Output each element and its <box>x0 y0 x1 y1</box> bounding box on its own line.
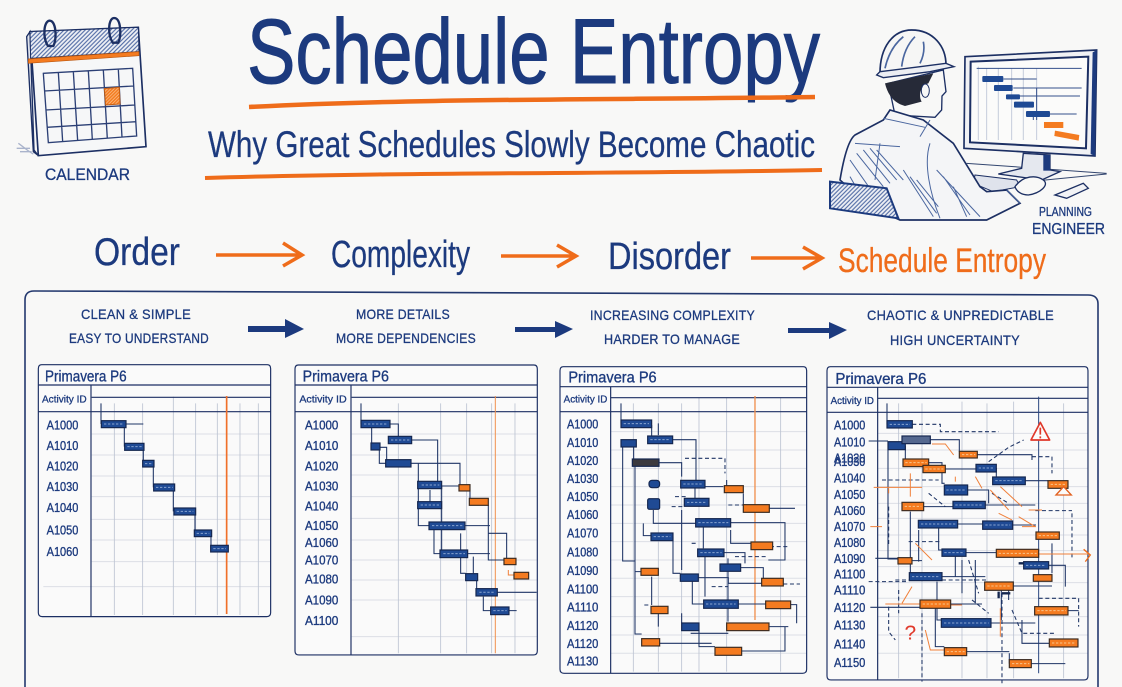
caption: stage 2: MORE DEPENDENCIES <box>336 330 476 346</box>
caption: stage 2: MORE DETAILS <box>356 306 450 322</box>
activity ids: A1090 <box>834 552 865 566</box>
flow: order: Order <box>94 231 180 274</box>
activity ids: A1000 <box>47 418 78 432</box>
activity ids: A1030 <box>834 455 865 469</box>
activity ids: A1060 <box>834 504 865 518</box>
calendar label: CALENDAR <box>45 165 130 184</box>
caption: stage 4: CHAOTIC & UNPREDICTABLE <box>867 307 1054 323</box>
activity ids: A1130 <box>567 655 598 669</box>
engineer label: PLANNING <box>1039 204 1092 219</box>
activity ids: A1000 <box>567 418 598 432</box>
main panel frame <box>25 291 1098 687</box>
orange scribble links <box>870 444 1089 650</box>
task bars <box>101 421 228 552</box>
activity ids: A1070 <box>305 553 338 567</box>
title underline <box>249 97 815 107</box>
activity ids: A1040 <box>47 501 78 515</box>
activity ids: A1120 <box>567 619 598 633</box>
blue task bars <box>621 420 741 631</box>
activity ids: A1050 <box>567 490 598 504</box>
activity ids: A1000 <box>305 419 338 433</box>
panel: gantt complexity <box>295 365 537 655</box>
activity ids: A1020 <box>305 459 338 473</box>
flow: complexity: Complexity <box>331 234 470 276</box>
activity ids: A1050 <box>305 519 338 533</box>
activity ids: A1030 <box>567 472 598 486</box>
caption: stage 2 <box>336 306 476 346</box>
data date line <box>753 396 757 620</box>
activity ids: A1100 <box>305 614 338 628</box>
blue task bars <box>361 420 509 615</box>
subtitle: Why Great Schedules Slowly Become Chaotic <box>208 124 815 165</box>
caption: stage 3: HARDER TO MANAGE <box>604 331 740 347</box>
activity ids <box>834 418 865 670</box>
activity ids <box>47 418 78 559</box>
activity ids: A1050 <box>47 523 78 537</box>
orange task bars <box>641 486 791 655</box>
activity ids <box>305 419 338 628</box>
grey-blue task bar <box>902 436 930 444</box>
caption: stage 3 <box>590 307 755 347</box>
question mark: ? <box>905 621 916 644</box>
small warning icon <box>1056 487 1071 495</box>
activity ids: A1060 <box>567 508 598 522</box>
activity ids: A1050 <box>834 488 865 502</box>
activity ids: A1010 <box>567 436 598 450</box>
activity ids: A1110 <box>567 601 598 615</box>
engineer label <box>1032 204 1105 238</box>
activity ids: A1090 <box>305 593 338 607</box>
orange task bars <box>459 485 529 579</box>
engineer label: ENGINEER <box>1032 221 1105 238</box>
activity ids: A1000 <box>834 418 865 432</box>
date line <box>1037 397 1040 673</box>
activity ids: A1090 <box>567 564 598 578</box>
column header: Activity ID <box>831 396 874 407</box>
activity ids: A1120 <box>834 601 865 615</box>
column header: Activity ID <box>564 395 607 406</box>
activity ids: A1060 <box>47 545 78 559</box>
arrow <box>788 322 847 339</box>
activity ids: A1010 <box>305 439 338 453</box>
activity ids: A1040 <box>305 499 338 513</box>
arrow <box>751 247 822 269</box>
title: Schedule Entropy <box>247 1 820 103</box>
arrow <box>501 245 576 267</box>
activity ids: A1020 <box>834 452 865 466</box>
warning icon <box>1031 422 1050 440</box>
arrow <box>216 243 302 266</box>
activity ids: A1100 <box>567 583 598 597</box>
activity ids: A1080 <box>567 545 598 559</box>
activity ids: A1080 <box>834 536 865 550</box>
dependency links <box>621 403 797 651</box>
activity ids: A1010 <box>834 435 865 449</box>
data date line <box>494 396 497 653</box>
blue task bars <box>887 421 1049 627</box>
arrow <box>248 319 304 338</box>
activity ids: A1120 <box>567 637 598 651</box>
arrow <box>515 321 573 338</box>
panel: gantt disorder <box>560 367 807 673</box>
column header: Activity ID <box>299 395 347 406</box>
icon: planning engineer at monitor <box>830 30 1107 220</box>
activity ids: A1060 <box>305 536 338 550</box>
activity ids: A1030 <box>305 479 338 493</box>
data date line <box>224 396 229 614</box>
dependency links <box>361 403 537 611</box>
activity ids: A1150 <box>834 656 865 670</box>
activity ids: A1140 <box>834 637 865 651</box>
window title: Primavera P6 <box>835 371 926 388</box>
subtitle underline <box>205 170 822 178</box>
flow: schedule entropy: Schedule Entropy <box>838 242 1046 280</box>
window title: Primavera P6 <box>303 369 389 386</box>
activity ids: A1100 <box>834 567 865 581</box>
dark task bar <box>632 459 659 466</box>
activity ids: A1020 <box>47 459 78 473</box>
window title: Primavera P6 <box>568 370 657 387</box>
activity ids: A1070 <box>834 520 865 534</box>
activity ids: A1010 <box>47 439 78 453</box>
caption: stage 1: CLEAN & SIMPLE <box>81 306 191 322</box>
icon: calendar <box>17 18 146 156</box>
activity ids: A1030 <box>47 480 78 494</box>
activity ids: A1080 <box>305 573 338 587</box>
caption: stage 1 <box>69 306 209 346</box>
activity ids <box>567 418 598 669</box>
dependency links <box>101 403 211 549</box>
panel: gantt order <box>38 365 271 617</box>
window title: Primavera P6 <box>45 369 127 386</box>
dependency links <box>869 403 1079 664</box>
activity ids: A1070 <box>567 527 598 541</box>
caption: stage 4: HIGH UNCERTAINTY <box>890 332 1020 348</box>
activity ids: A1020 <box>567 454 598 468</box>
activity ids: A1040 <box>834 472 865 486</box>
column header: Activity ID <box>42 395 87 406</box>
caption: stage 3: INCREASING COMPLEXITY <box>590 307 755 323</box>
activity ids: A1110 <box>834 584 865 598</box>
caption: stage 1: EASY TO UNDERSTAND <box>69 330 209 346</box>
orange task bars <box>898 451 1078 668</box>
activity ids: A1130 <box>834 619 865 633</box>
panel: gantt schedule entropy <box>827 367 1090 683</box>
flow: disorder: Disorder <box>608 236 731 278</box>
caption: stage 4 <box>867 307 1054 348</box>
